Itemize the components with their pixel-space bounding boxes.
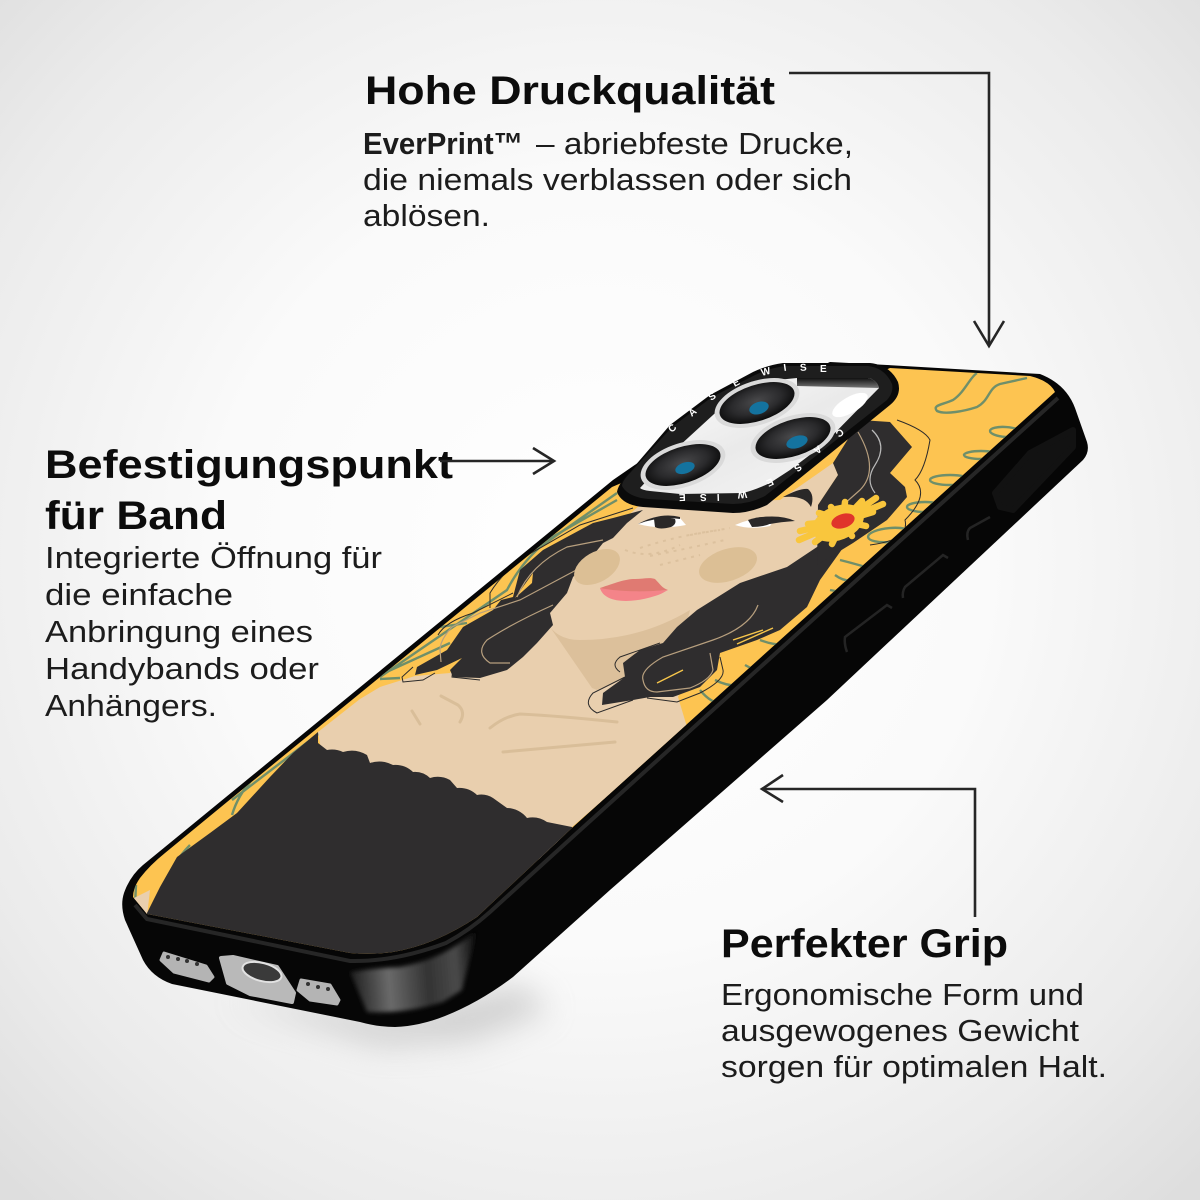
callout: strap attachment	[45, 443, 453, 723]
island window	[640, 378, 879, 494]
heading: Befestigungspunkt für Band	[45, 443, 453, 538]
body text: strap attachment: Handybands oder	[45, 652, 319, 686]
body text: print quality: – abriebfeste Drucke,	[536, 127, 853, 161]
arrow: print quality	[789, 73, 1004, 346]
lens left	[634, 430, 732, 500]
body text: grip	[721, 978, 1107, 1084]
camera island	[617, 362, 899, 513]
callout: grip	[721, 922, 1107, 1084]
body text: grip: Ergonomische Form und	[721, 978, 1084, 1012]
arrow: strap attachment	[440, 448, 554, 474]
brand text: CASEWISE	[678, 426, 845, 502]
body text: strap attachment: Anhängers.	[45, 689, 217, 723]
neck lines	[412, 696, 617, 752]
brand text	[666, 362, 845, 502]
cheeks	[574, 547, 757, 585]
flower	[799, 497, 883, 549]
hair right	[602, 543, 845, 705]
speaker left	[161, 953, 213, 981]
side buttons	[845, 517, 990, 652]
hair top right	[817, 420, 912, 550]
dress	[147, 732, 572, 954]
rim highlight	[135, 398, 1058, 961]
arrow: grip	[762, 775, 975, 917]
body text: print quality: EverPrint™	[363, 127, 523, 161]
lips	[600, 578, 668, 601]
heading: Hohe Druckqualität: Hohe Druckqualität	[365, 69, 775, 113]
callout: print quality	[363, 69, 853, 233]
hair left	[415, 510, 643, 678]
flash	[829, 388, 871, 422]
body text: print quality	[363, 127, 853, 233]
phone case illustration	[120, 350, 1088, 1027]
corner highlight	[350, 930, 477, 1012]
vines	[135, 373, 1046, 905]
bottom ports	[161, 953, 339, 1004]
body text: print quality: die niemals verblassen oder sich	[363, 163, 852, 197]
printed face	[133, 368, 1055, 954]
skin	[318, 463, 838, 860]
camera control	[995, 430, 1073, 510]
yellow print	[120, 350, 1080, 970]
phone body bumper	[122, 362, 1088, 1027]
eyes	[638, 489, 812, 528]
island ring	[617, 363, 899, 513]
speaker right	[298, 980, 339, 1004]
body text: strap attachment	[45, 541, 382, 723]
body text: strap attachment: Anbringung eines	[45, 615, 313, 649]
body text: strap attachment: die einfache	[45, 578, 233, 612]
hair strands	[402, 420, 930, 713]
heading: Befestigungspunkt für Band: Befestigungspunkt	[45, 443, 453, 487]
heading: Befestigungspunkt für Band: für Band	[45, 494, 227, 538]
charging port	[221, 957, 294, 1002]
phone drop shadow	[230, 985, 550, 1045]
heading: Perfekter Grip: Perfekter Grip	[721, 922, 1008, 966]
body text: grip: ausgewogenes Gewicht	[721, 1014, 1080, 1048]
lens top	[708, 368, 806, 438]
body text: print quality: ablösen.	[363, 199, 490, 233]
port hole	[240, 958, 284, 986]
body text: grip: sorgen für optimalen Halt.	[721, 1050, 1107, 1084]
brand text: CASEWISE	[666, 362, 827, 435]
window inner shadow	[797, 378, 879, 388]
skin corner patch	[134, 890, 150, 914]
lens right	[744, 403, 842, 473]
island bevel	[622, 366, 892, 504]
freckles	[625, 528, 730, 565]
neck shadow	[550, 610, 690, 690]
body text: strap attachment: Integrierte Öffnung für	[45, 541, 382, 575]
